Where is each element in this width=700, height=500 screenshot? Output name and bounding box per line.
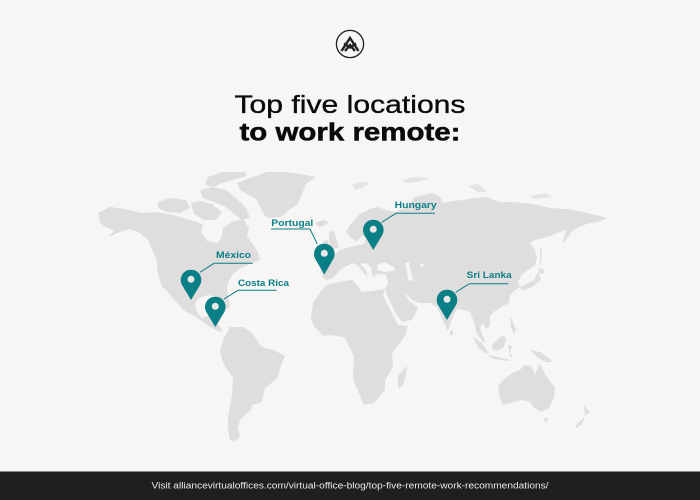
inland seas: [355, 236, 424, 281]
map: Tasmania and New Zealand: [543, 406, 590, 429]
world map: [98, 172, 607, 441]
pin: Costa Rica: [205, 297, 226, 327]
label: Costa Rica: Costa Rica: [238, 278, 290, 289]
map: Madagascar: [398, 366, 407, 388]
pin: México: [181, 270, 201, 300]
title: [234, 91, 466, 146]
title: Top five locations: [234, 91, 466, 119]
footer bar: Visit alliancevirtualoffices.com/virtual-office-blog/top-five-remote-work-recommendations/: [152, 480, 549, 490]
pin: Portugal: [314, 244, 335, 274]
map: Eurasia: [320, 193, 607, 343]
title: to work remote:: [240, 118, 460, 146]
connector lines: [200, 213, 508, 299]
map: North America: [98, 207, 260, 332]
label: Hungary: Hungary: [395, 200, 437, 211]
map: British Isles and Iceland: [316, 220, 339, 250]
map: Southeast Asia islands: [450, 317, 552, 362]
map: Africa: [311, 280, 408, 405]
label: Portugal: Portugal: [271, 218, 313, 229]
pin: Sri Lanka: [437, 290, 457, 320]
map: small arctic islands: [352, 177, 553, 199]
logo: [336, 30, 364, 58]
footer bar: [0, 472, 700, 500]
map: Australia: [498, 364, 555, 412]
pin: Hungary: [363, 220, 384, 250]
map: Japan and Sakhalin: [520, 246, 545, 291]
label: Sri Lanka: Sri Lanka: [467, 270, 512, 281]
map: South America: [220, 327, 285, 441]
map: Canadian Arctic islands: [158, 172, 250, 220]
label: México: México: [216, 250, 251, 261]
map: Greenland: [237, 172, 316, 218]
